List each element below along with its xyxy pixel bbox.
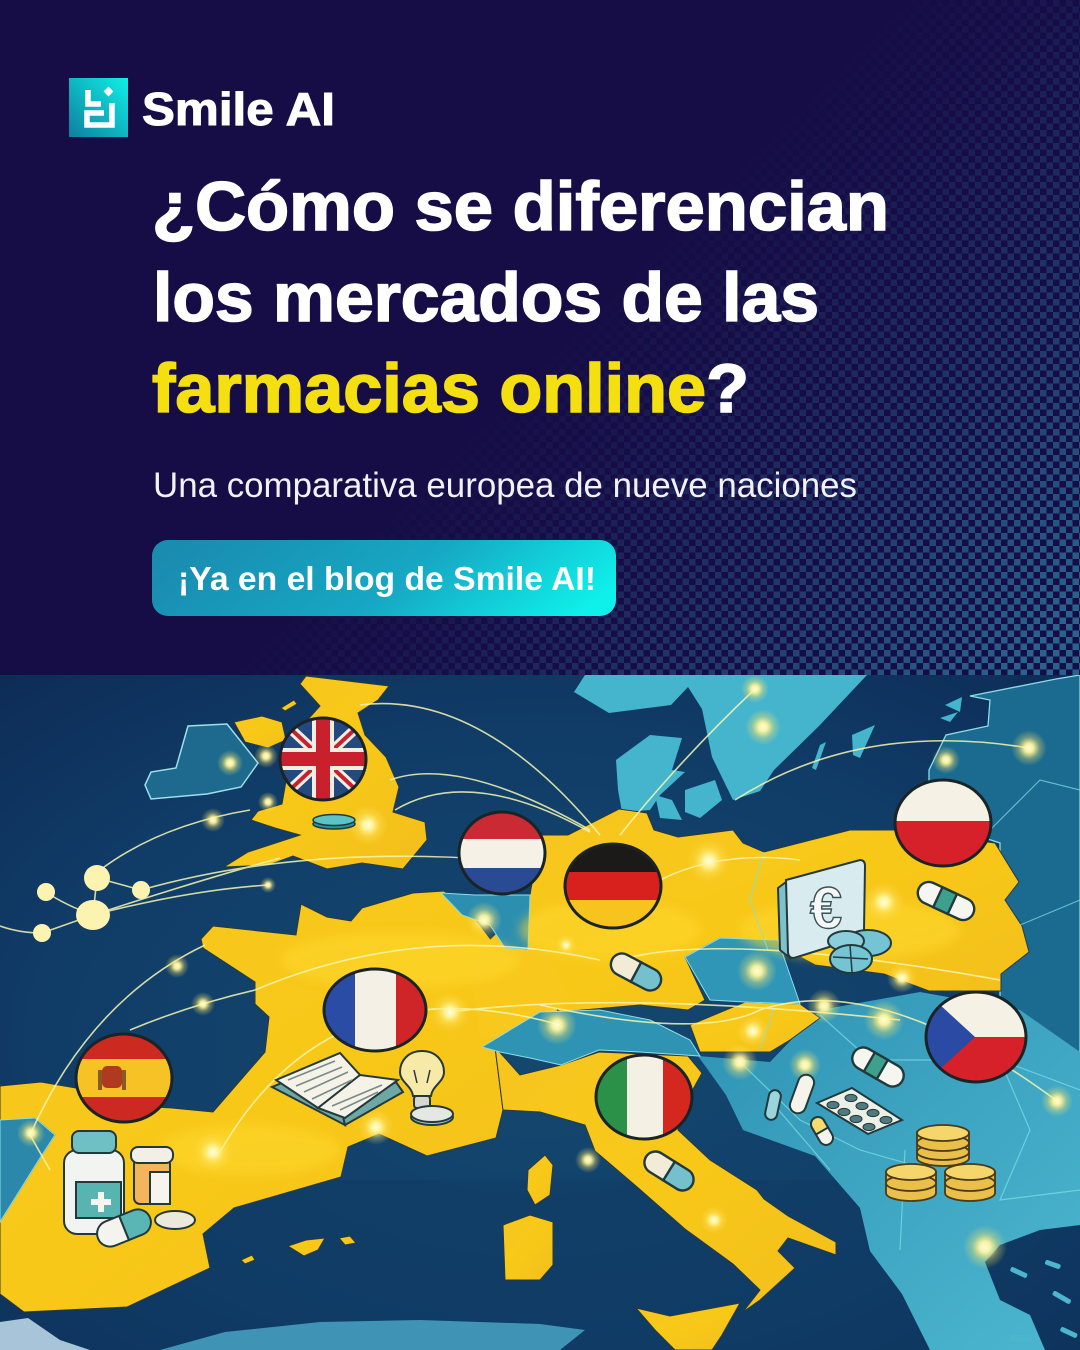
icon: euro card with pills — [778, 860, 891, 973]
icon: capsule germany — [607, 950, 665, 994]
icon: capsule italy — [640, 1147, 698, 1195]
region: czechia — [685, 938, 800, 1004]
flag: poland — [895, 780, 991, 866]
region: northern europe — [574, 675, 1080, 1060]
land seam patch — [490, 934, 558, 1010]
land: northern ireland — [234, 716, 286, 748]
logo — [69, 78, 335, 137]
title: los mercados de las — [153, 259, 819, 336]
header panel — [358, 0, 1080, 675]
land: italy — [495, 1047, 836, 1312]
subtitle: Una comparativa europea de nueve naciones — [153, 466, 857, 505]
land: sardinia — [503, 1215, 553, 1280]
flag: france — [324, 969, 426, 1051]
land: germany and poland — [495, 809, 1029, 1012]
icon: capsule poland — [914, 878, 978, 924]
icon: light bulb and coin — [400, 1051, 453, 1125]
region: ireland — [145, 724, 258, 799]
region: benelux — [441, 893, 530, 950]
title — [152, 168, 889, 427]
flag: czechia — [926, 992, 1026, 1082]
flag: spain — [76, 1034, 172, 1122]
icon: flat pill uk — [313, 814, 355, 829]
flag: germany — [565, 844, 661, 928]
call to action button: ¡Ya en el blog de Smile AI! — [178, 560, 596, 597]
region: yellow land — [0, 676, 1029, 1350]
land: balearic islands — [241, 1236, 356, 1264]
flag: italy — [596, 1055, 692, 1139]
icon: logo mark — [69, 78, 128, 137]
region: alps — [482, 1010, 700, 1065]
border lines — [740, 780, 1080, 1250]
title: ¿Cómo se diferencian — [152, 168, 889, 245]
icon: capsule spain — [93, 1205, 155, 1251]
region: portugal — [0, 1118, 55, 1222]
icon: medicine bottle and jar — [64, 1131, 195, 1251]
flag: united kingdom — [279, 718, 367, 800]
icon: blister pack — [817, 1088, 902, 1134]
icon: open book — [272, 1053, 403, 1125]
icon: euro card with pills: € — [810, 876, 842, 941]
logo wordmark: Smile AI — [142, 83, 335, 135]
icon: capsule balkans — [848, 1043, 908, 1091]
land: sicily — [636, 1303, 740, 1350]
title: farmacias online? — [152, 350, 749, 427]
land: corsica — [527, 1155, 553, 1205]
land: united kingdom — [224, 676, 427, 869]
icon: small jar — [131, 1147, 173, 1204]
network nodes — [33, 865, 150, 942]
land: austria — [690, 1002, 820, 1052]
icon: bottle — [64, 1131, 124, 1234]
region: north africa — [0, 1318, 585, 1350]
land: scottish island — [281, 700, 297, 711]
icon: coin stacks — [886, 1125, 995, 1201]
land highlights — [160, 900, 960, 1175]
connection lines — [0, 689, 1057, 1170]
map illustration — [0, 675, 1080, 1350]
glowing dots — [17, 675, 1073, 1269]
icon: tablet — [155, 1211, 195, 1229]
region: aegean islands — [1010, 1259, 1078, 1341]
land: france and spain — [0, 891, 560, 1312]
icon: small vials — [764, 1072, 836, 1147]
call to action button — [152, 540, 616, 616]
region: balkans — [698, 992, 1080, 1350]
flag: netherlands — [459, 812, 545, 894]
